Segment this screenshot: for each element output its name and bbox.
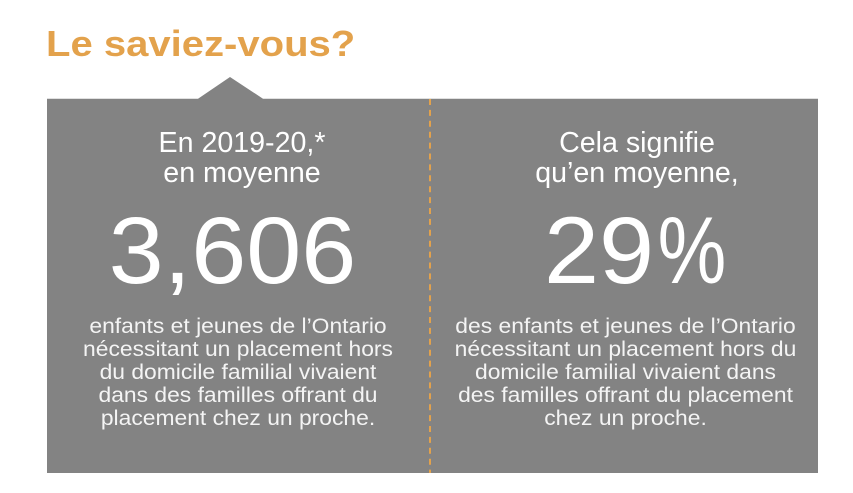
right heading: Cela signifie (559, 127, 715, 159)
right heading: qu’en moyenne, (535, 157, 739, 189)
left description: enfants et jeunes de l’Ontario (89, 314, 387, 338)
left heading: en moyenne (163, 157, 321, 189)
right description (455, 314, 796, 430)
title: Le saviez-vous? (46, 23, 355, 64)
right description: des familles offrant du placement (458, 384, 793, 406)
left description: nécessitant un placement hors (83, 338, 393, 360)
left description: placement chez un proche. (101, 406, 375, 430)
right description: nécessitant un placement hors du (455, 338, 796, 360)
left heading: En 2019-20,* (159, 127, 325, 159)
right big number: % (657, 198, 726, 304)
left big number: 3,606 (109, 198, 356, 304)
right description: chez un proche. (544, 406, 707, 430)
left description (83, 314, 393, 430)
divider: dashed orange line (429, 99, 431, 473)
left heading (159, 127, 325, 189)
left description: dans des familles offrant du (98, 384, 378, 406)
right description: des enfants et jeunes de l’Ontario (455, 314, 796, 338)
right heading (535, 127, 739, 189)
right big number (544, 198, 726, 304)
panel: grey background with pointer (47, 77, 818, 473)
right big number: 29 (544, 198, 654, 304)
left description: du domicile familial vivaient (100, 360, 376, 384)
right description: domicile familial vivaient dans (475, 360, 776, 384)
